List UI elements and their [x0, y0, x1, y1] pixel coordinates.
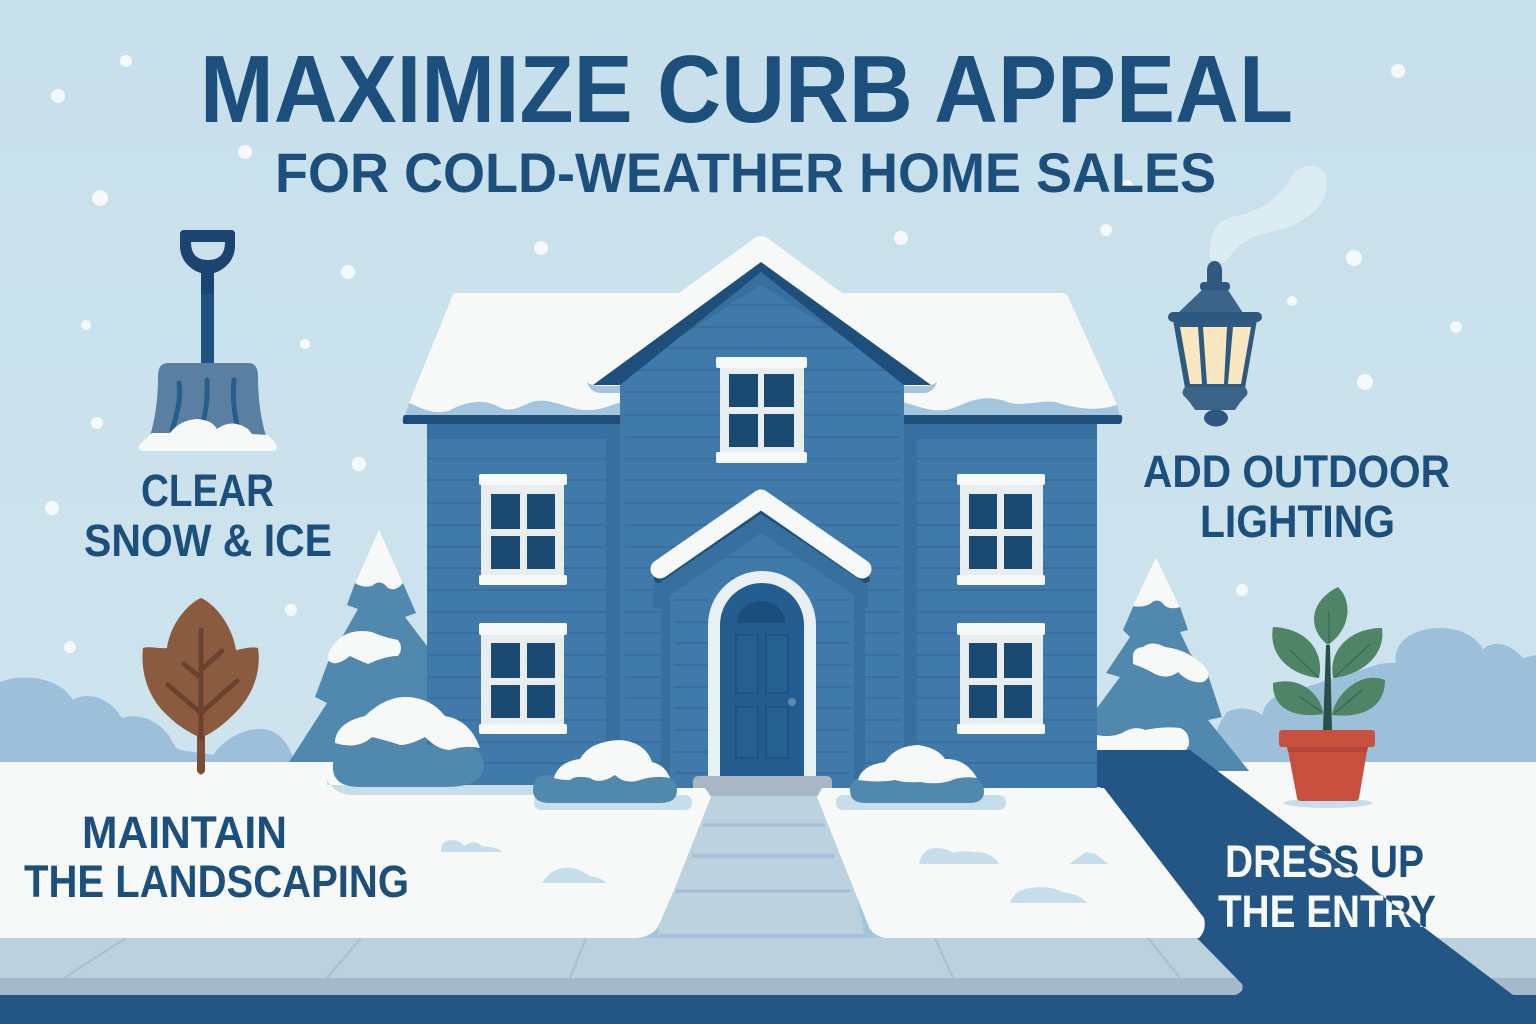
shovel ribs: [172, 380, 237, 430]
door frame: [708, 571, 816, 777]
porch snow roof: [660, 499, 862, 569]
label text on walkway: [1218, 846, 1424, 927]
eave boards: [403, 415, 1122, 424]
pot rim: [1279, 730, 1375, 747]
label: maintain the landscaping: MAINTAIN: [82, 807, 287, 858]
lantern finial: [1207, 261, 1222, 282]
gable snow icicles: [587, 382, 937, 393]
label: maintain the landscaping: [24, 807, 409, 907]
lantern body: [1173, 320, 1257, 388]
label: maintain the landscaping: THE LANDSCAPING: [24, 856, 409, 907]
bush snow: [858, 745, 977, 783]
porch body: [670, 533, 854, 795]
snowy ground: [0, 762, 1536, 942]
window: lower left: [479, 623, 567, 734]
tree snow branch: [1133, 644, 1208, 682]
porch dark trim: [658, 509, 866, 579]
shovel blade: [150, 363, 266, 436]
label text on snow: DRESS UP: [1225, 836, 1424, 887]
bush center right: [850, 745, 984, 803]
curb: [0, 978, 1536, 995]
label text on snow: [1218, 836, 1436, 937]
plant stem: [1323, 645, 1332, 730]
label: add outdoor lighting: ADD OUTDOOR: [1143, 446, 1450, 497]
shovel shaft: [201, 294, 214, 365]
background hills right: [1214, 628, 1536, 762]
lantern base: [1182, 387, 1248, 410]
eave shadow bands: [427, 424, 1097, 439]
label: clear snow and ice: SNOW & ICE: [84, 515, 332, 566]
door panels: [736, 635, 788, 758]
bush left large: [333, 697, 484, 787]
icon: brown leaf: [142, 598, 259, 774]
label text on walkway: THE ENTRY: [1218, 886, 1436, 937]
icon: snow shovel: [139, 230, 276, 451]
window: upper left: [479, 474, 567, 585]
bush snow: [335, 697, 480, 750]
porch: [653, 499, 868, 796]
porch shade: [653, 512, 868, 795]
label text on snow: THE ENTRY: [1218, 886, 1436, 937]
road: [0, 995, 1536, 1024]
right wing: [904, 420, 1097, 788]
lantern collar: [1200, 282, 1230, 291]
front lawn left: [0, 788, 711, 938]
plant leaves: [1272, 587, 1385, 716]
shovel snow: [139, 419, 276, 451]
leaf blade: [142, 598, 259, 738]
icon: potted plant: [1272, 587, 1385, 808]
plant veins: [1290, 612, 1370, 713]
tree snow branch: [328, 631, 401, 664]
center siding: [625, 305, 900, 763]
front walkway: [658, 796, 866, 936]
title: MAXIMIZE CURB APPEAL: [200, 36, 1293, 143]
lantern cap: [1178, 290, 1243, 313]
pot body: [1287, 745, 1368, 801]
leaf veins: [168, 630, 237, 738]
house: [403, 236, 1122, 790]
chimney smoke: [1210, 165, 1327, 262]
window: upper right: [957, 474, 1045, 585]
front lawn right: [817, 788, 1205, 938]
bush center left: [533, 740, 677, 803]
icon: lantern with smoke: [1168, 165, 1327, 426]
corner pilasters: [606, 420, 917, 790]
evergreen tree right: [1097, 557, 1249, 771]
left wing: [427, 420, 610, 788]
evergreen tree left: [289, 529, 430, 762]
sidewalk: [0, 938, 1536, 995]
wing siding: [427, 458, 1097, 763]
porch siding: [674, 557, 850, 773]
falling snow dots: [45, 55, 1462, 653]
roof snow shadow left: [405, 401, 622, 416]
door: [720, 583, 804, 777]
gable dark trim: [593, 262, 931, 385]
lantern top bar: [1168, 312, 1262, 322]
dark entry walkway: [0, 750, 1513, 1024]
label: clear snow and ice: CLEAR: [141, 465, 274, 516]
roof with snow: [405, 236, 1117, 416]
window: gable: [716, 357, 807, 463]
gable center body: [620, 268, 904, 790]
subtitle: FOR COLD-WEATHER HOME SALES: [275, 141, 1216, 204]
label text on walkway: DRESS UP: [1225, 836, 1424, 887]
label: clear snow and ice: [84, 465, 332, 566]
leaf stem: [197, 730, 205, 774]
pot rim shadow: [1287, 747, 1368, 752]
tree snow cap: [1133, 557, 1180, 608]
lawn snow patches and shadows: [327, 780, 1108, 903]
tree snow base: [1097, 727, 1189, 750]
window: lower right: [957, 623, 1045, 734]
lantern ball: [1204, 410, 1228, 426]
label: dress up the entry: [1218, 845, 1436, 927]
doorstep: [693, 776, 832, 796]
door knob: [788, 698, 796, 706]
plant shadow: [1284, 798, 1372, 808]
shovel handle: [180, 230, 235, 294]
walkway base shade: [628, 796, 895, 938]
label: add outdoor lighting: [1143, 446, 1450, 547]
label: add outdoor lighting: LIGHTING: [1200, 496, 1395, 547]
bush snow: [554, 740, 670, 782]
background hills left: [0, 677, 295, 762]
door transom: [737, 601, 785, 623]
tree snow cap: [355, 529, 403, 589]
lantern glass: [1180, 327, 1251, 384]
roof snow shadow right: [902, 398, 1120, 416]
